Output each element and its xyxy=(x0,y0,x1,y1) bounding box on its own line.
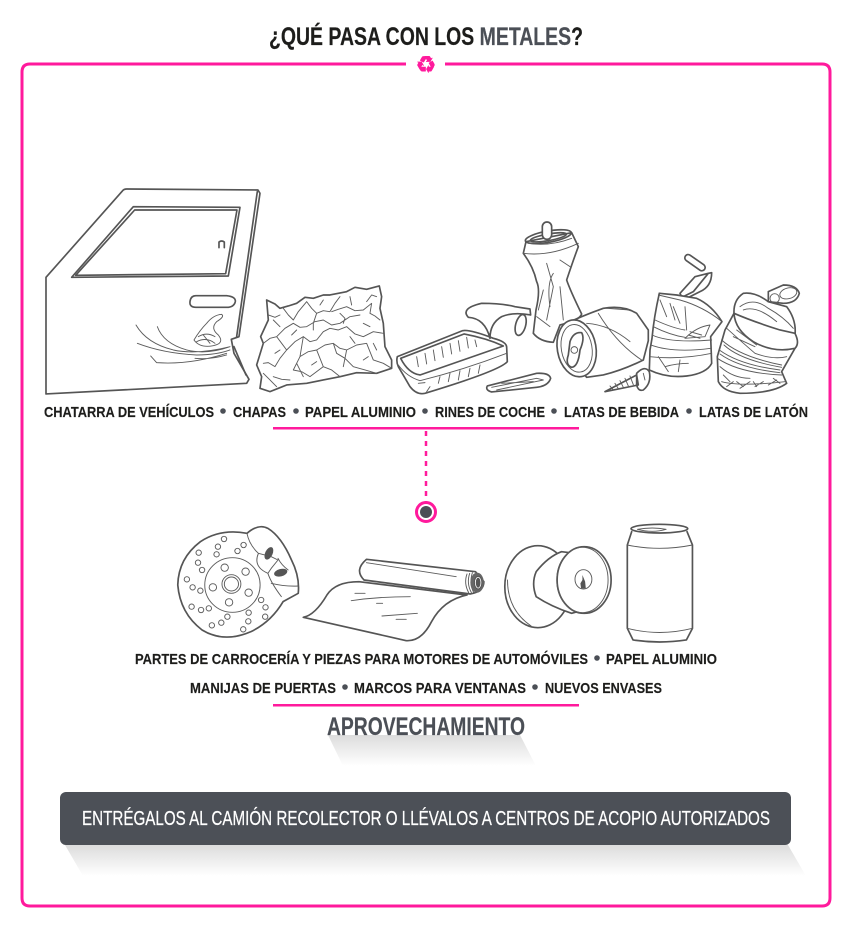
list: collected metals: CHATARRA DE VEHÍCULOS xyxy=(44,404,214,421)
illustration: crumpled sheet xyxy=(257,286,392,392)
illustration: hair clip xyxy=(487,373,551,392)
banner xyxy=(60,792,791,845)
illustration: new can xyxy=(627,524,692,642)
heading shadow xyxy=(328,735,536,766)
illustration: screw xyxy=(605,369,650,392)
illustration: open tin xyxy=(397,303,531,394)
illustration: crushed can standing xyxy=(523,222,582,342)
list: collected metals: PAPEL ALUMINIO xyxy=(305,404,416,421)
heading: aprovechamiento: APROVECHAMIENTO xyxy=(327,713,525,741)
list: collected metals: CHAPAS xyxy=(233,404,286,421)
list: new products line 1: PAPEL ALUMINIO xyxy=(606,651,717,668)
list: new products line 2 xyxy=(190,680,662,697)
list: collected metals: LATAS DE LATÓN xyxy=(699,403,808,421)
list: new products line 1: PARTES DE CARROCERÍA Y PIEZAS PARA MOTORES DE AUTOMÓVILES xyxy=(135,650,588,668)
illustration: brake disc xyxy=(178,527,299,637)
list: new products line 2: MANIJAS DE PUERTAS xyxy=(190,680,336,697)
illustration: foil roll xyxy=(303,559,484,641)
illustration: door knob xyxy=(505,546,611,628)
list: collected metals: LATAS DE BEBIDA xyxy=(564,404,679,421)
list: collected metals: RINES DE COCHE xyxy=(435,404,545,421)
illustration: crushed can spiral xyxy=(717,285,799,393)
list: collected metals xyxy=(44,403,808,421)
arrow: dashed connector xyxy=(416,431,436,522)
banner shadow xyxy=(65,845,806,876)
list: new products line 2: NUEVOS ENVASES xyxy=(545,680,662,697)
title: ¿QUÉ PASA CON LOS METALES? xyxy=(269,22,583,51)
illustration: crushed can lying xyxy=(553,307,648,380)
icon: recycle: ♻ xyxy=(416,52,436,78)
divider line bottom xyxy=(273,704,579,706)
divider line top xyxy=(273,427,579,430)
list: new products line 2: MARCOS PARA VENTANAS xyxy=(354,680,526,697)
illustration: car door xyxy=(46,189,260,394)
illustration: crushed can with tab xyxy=(649,253,722,376)
